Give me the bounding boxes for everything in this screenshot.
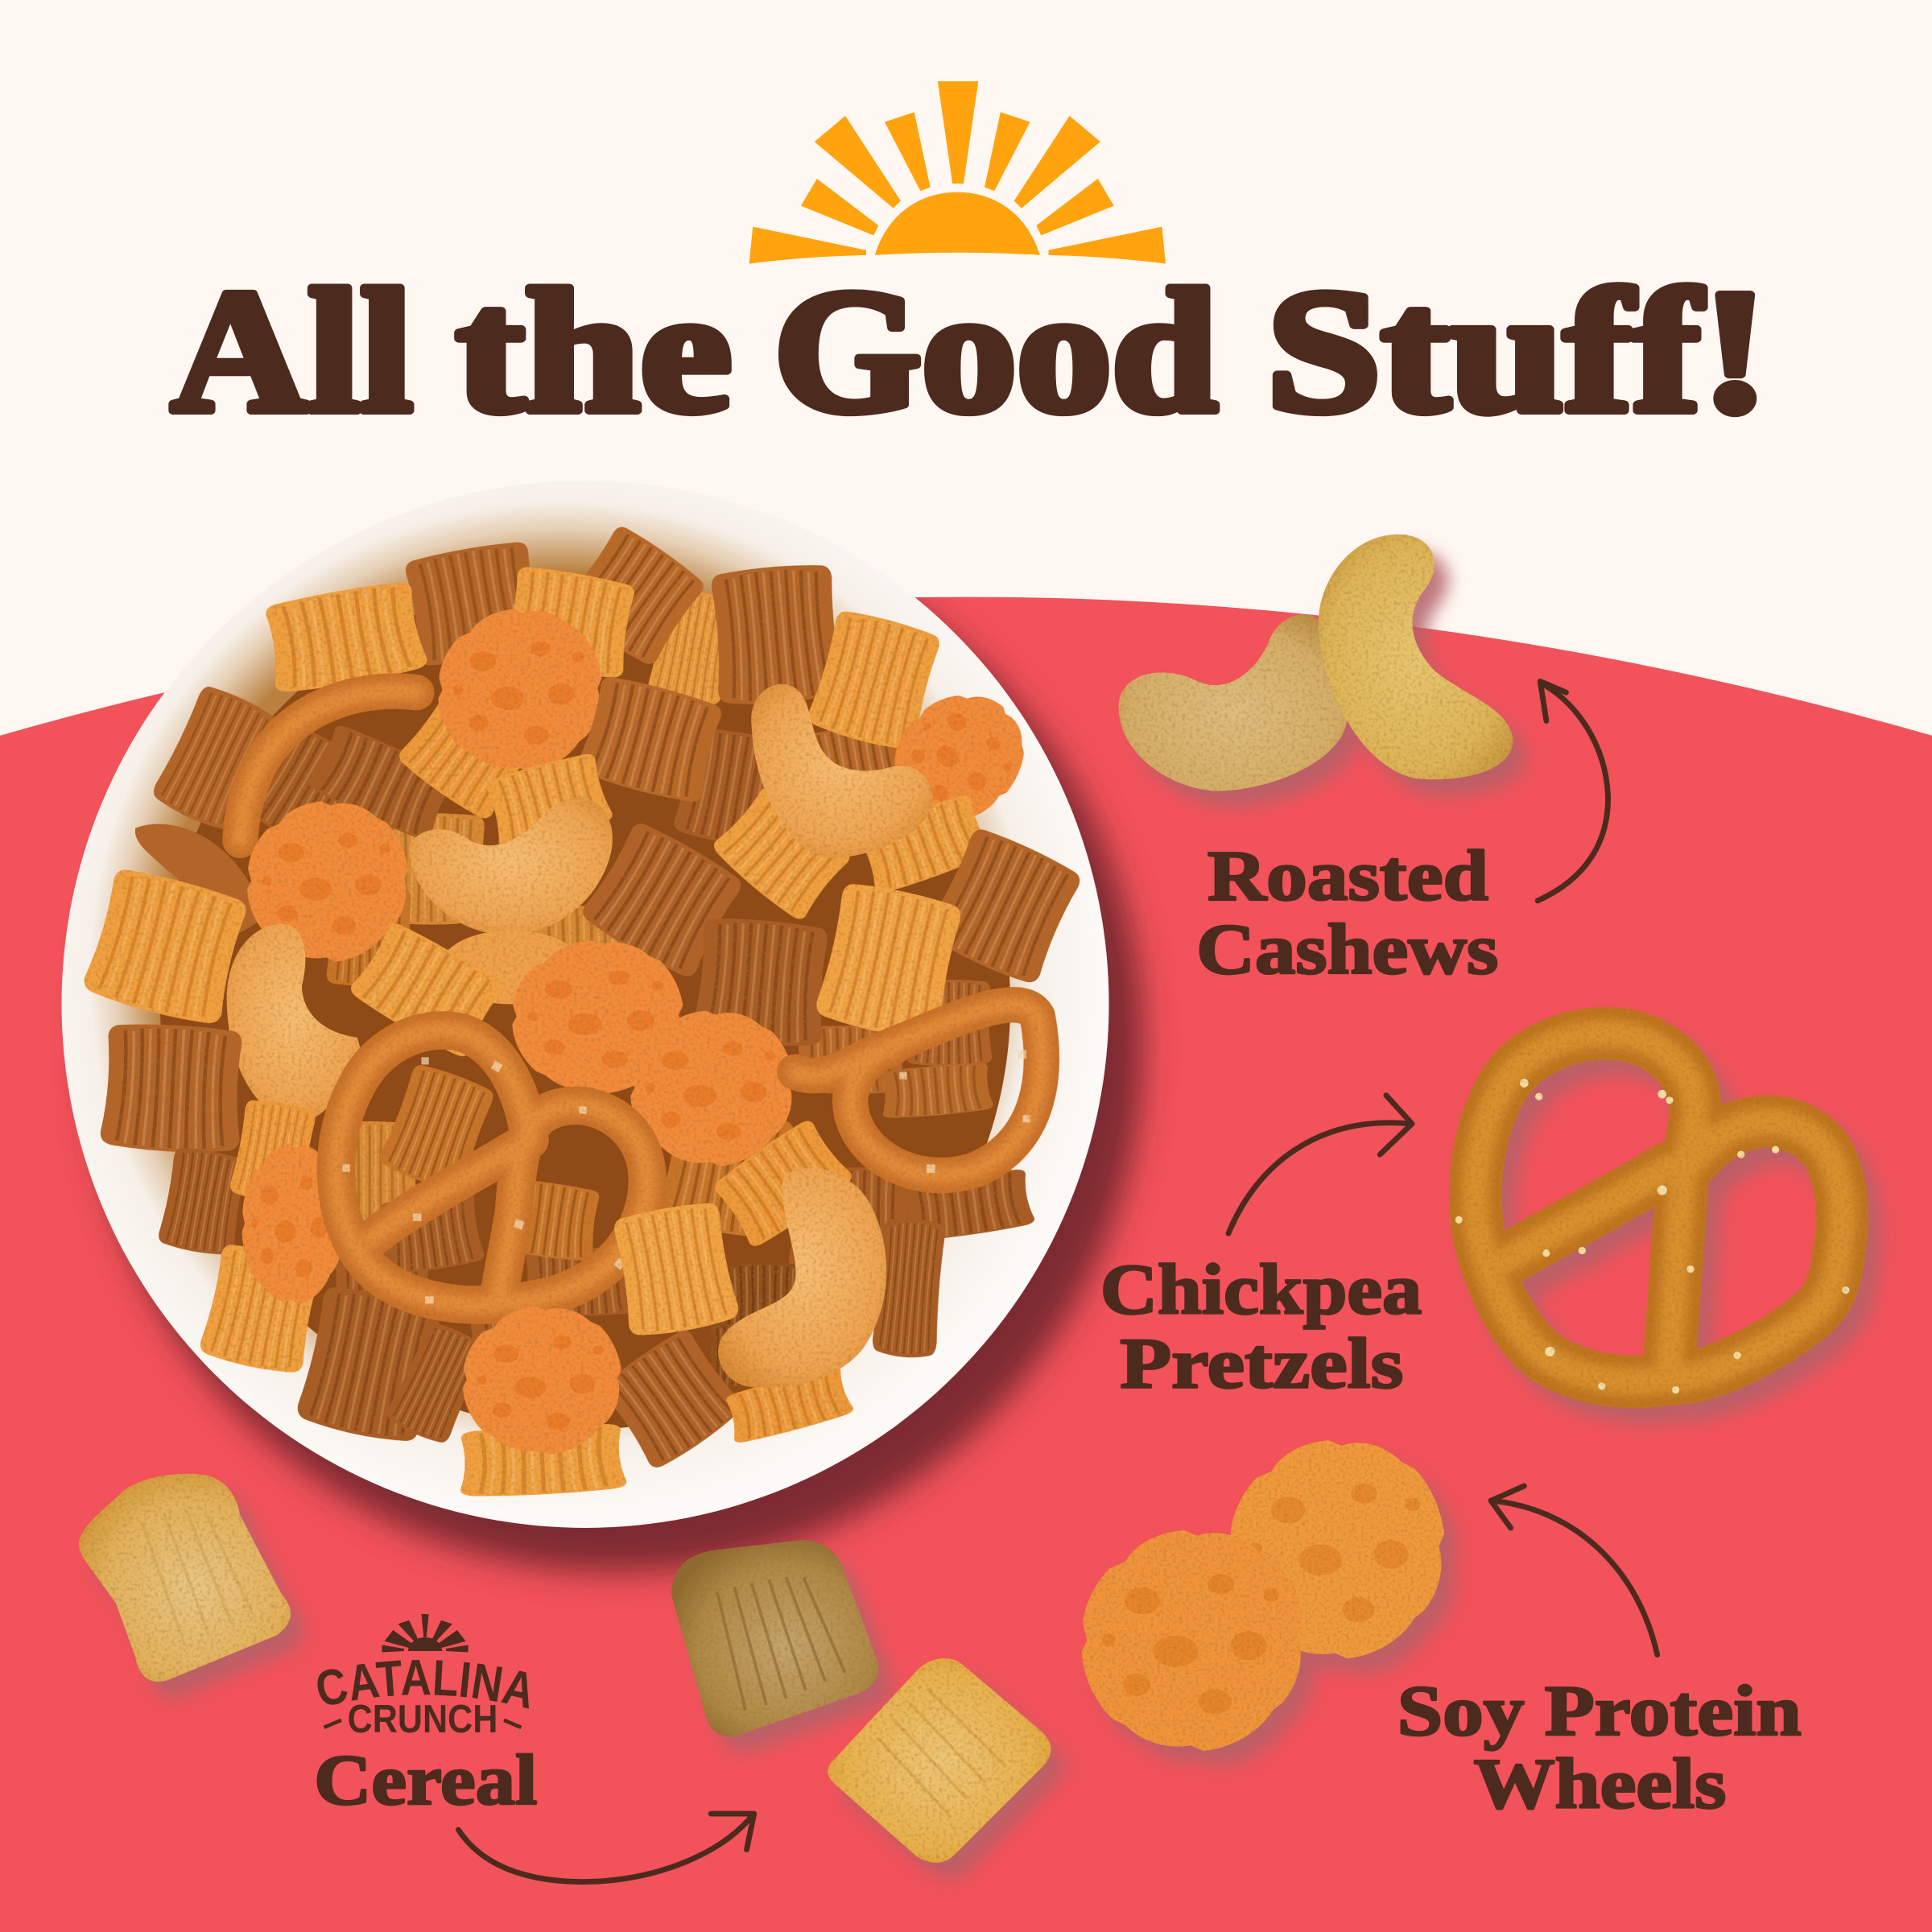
title: All	[171, 254, 413, 449]
cashew right	[1319, 535, 1513, 779]
snack mix inside bowl	[80, 520, 1087, 1499]
label: chickpea pretzels: Chickpea	[1100, 1251, 1422, 1330]
wheels: centre pair	[512, 940, 794, 1166]
cashews: loose pair	[1119, 535, 1513, 791]
cereal: loose pale piece	[79, 1474, 291, 1682]
label: soy protein wheels: Soy Protein	[1397, 1672, 1802, 1751]
pretzel: large centre	[336, 1030, 647, 1305]
curved brown piece	[135, 824, 265, 936]
bowl	[62, 481, 1109, 1528]
cereal: loose gold piece	[828, 1658, 1051, 1863]
label: soy protein wheels: Wheels	[1474, 1744, 1726, 1823]
background: red curved panel	[0, 597, 1932, 1932]
cereal: centre left	[346, 917, 509, 1062]
icon: sun logo	[749, 81, 1166, 264]
arrow: to cashews	[1538, 681, 1608, 901]
logo sun	[382, 1614, 469, 1653]
cashew: upper right	[751, 684, 932, 858]
wheel left	[1082, 1530, 1304, 1751]
wheel: bottom	[463, 1307, 621, 1455]
title	[171, 254, 1769, 449]
wheel: upper centre	[438, 609, 601, 772]
cashew: centre	[409, 799, 613, 935]
cereal: far left	[80, 864, 252, 1030]
label: chickpea pretzels: Pretzels	[1120, 1324, 1403, 1403]
bowl shadow	[89, 518, 1143, 1572]
arrow: to cereal	[458, 1814, 754, 1882]
front cereal pieces	[457, 1115, 947, 1499]
wheel right	[1229, 1440, 1444, 1658]
logo: catalina crunch: CRUNCH	[348, 1698, 497, 1741]
pretzel: right	[795, 1005, 1042, 1175]
wheel: left	[247, 801, 408, 961]
pretzel: loose	[1455, 1034, 1849, 1393]
pretzel: upper left arc	[240, 691, 416, 840]
cashew fragment behind wheel	[440, 931, 583, 1004]
cashew: lower right	[718, 1168, 886, 1388]
logo: catalina crunch: CATALINA	[317, 1624, 529, 1728]
label: roasted cashews: Cashews	[1196, 910, 1498, 989]
wheel: far right	[869, 668, 1048, 848]
cereal: front right	[813, 879, 966, 1044]
middle layer of cereal pieces	[482, 672, 1087, 1050]
back layer of cereal pieces	[149, 520, 944, 845]
title: Good	[774, 254, 1217, 449]
title: the	[456, 254, 732, 449]
cashew left	[1119, 614, 1348, 791]
label: roasted cashews: Roasted	[1208, 836, 1488, 915]
lower cereal layer	[100, 1022, 1035, 1447]
cereal: loose tan piece	[671, 1540, 878, 1736]
label: roasted cashews	[1196, 836, 1498, 989]
logo: catalina crunch	[317, 1614, 529, 1741]
filler layer of shadowed pieces	[236, 717, 992, 1386]
wheels: loose pair	[1082, 1440, 1444, 1751]
title: Stuff!	[1266, 254, 1769, 449]
label: cereal: Cereal	[314, 1741, 537, 1820]
label: chickpea pretzels	[1100, 1251, 1422, 1403]
label: soy protein wheels	[1397, 1672, 1802, 1823]
cashew: left	[227, 924, 364, 1121]
arrow: to pretzel	[1228, 1096, 1412, 1233]
arrow: to wheels	[1491, 1486, 1657, 1655]
wheel: lower left	[242, 1144, 345, 1304]
